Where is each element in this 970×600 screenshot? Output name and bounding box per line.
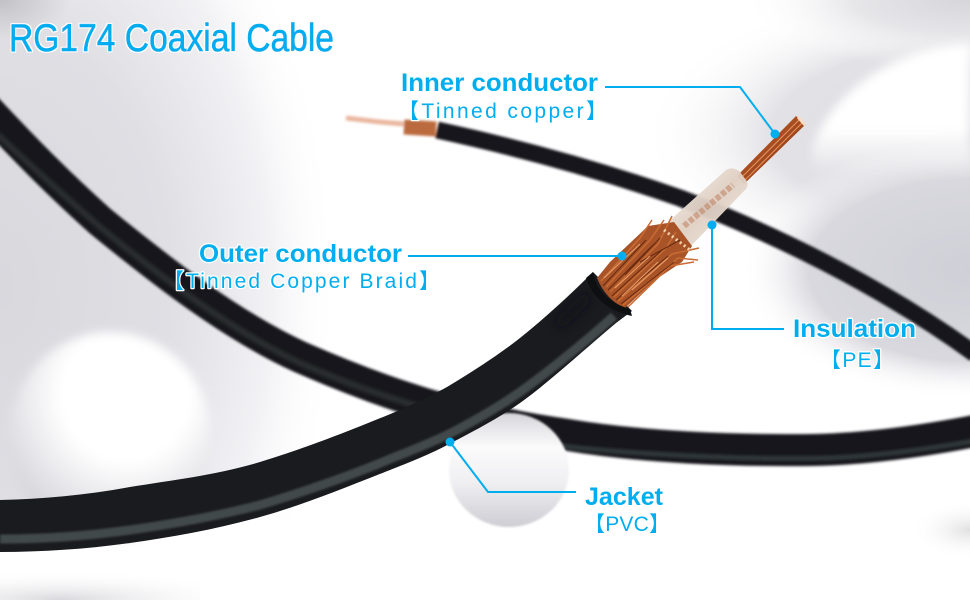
callout: inner conductor: 【Tinned copper】 [398,100,607,123]
callout: insulation [708,220,916,372]
inner conductor [737,116,806,184]
callout: jacket: 【PVC】 [584,513,670,536]
insulation [668,168,748,247]
sphere: upper right [812,44,970,175]
callout: outer conductor [163,240,626,293]
callout: outer conductor: 【Tinned Copper Braid】 [163,270,440,293]
cable: back, lower strand [0,107,970,458]
callout: jacket [446,438,670,536]
callout: outer conductor: Outer conductor [199,240,402,268]
sphere: under jacket [449,413,569,527]
cable: front jacket [0,272,632,552]
callout: insulation: 【PE】 [820,349,894,372]
cable end lip [586,272,632,316]
callout: inner conductor: Inner conductor [401,69,598,97]
outer conductor braid [597,216,699,308]
cable: back, upper strand [346,118,970,354]
title: RG174 Coaxial Cable [9,17,334,60]
sphere: left [9,332,211,540]
callout: insulation: Insulation [793,315,916,343]
callout: jacket: Jacket [585,483,664,511]
callout: inner conductor [398,69,780,138]
